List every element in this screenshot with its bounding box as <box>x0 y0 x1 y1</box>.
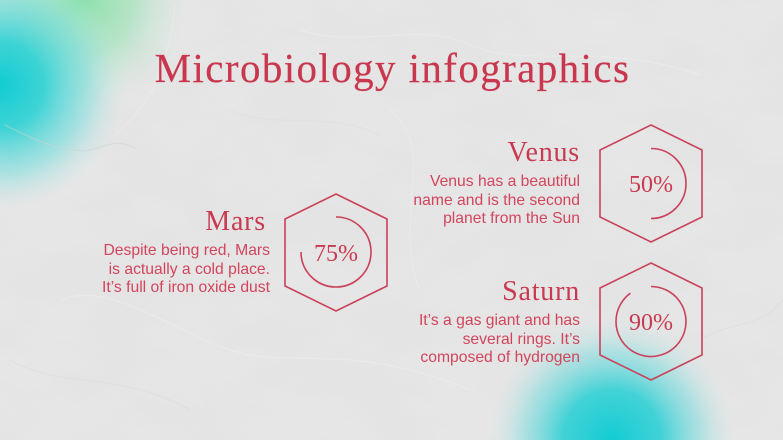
text block: Venus description: name and is the second <box>413 192 580 208</box>
heading: Mars: Mars <box>205 206 266 237</box>
heading: Saturn: Saturn <box>502 276 580 307</box>
text block: Saturn description <box>419 312 580 366</box>
chart: Mars 75%: 75% <box>314 241 358 267</box>
text block: Mars description <box>102 242 270 296</box>
chart: Venus 50%: 50% <box>629 172 673 198</box>
chart: Saturn 90%: 90% <box>629 310 673 336</box>
chart: Mars 75% <box>284 193 388 312</box>
text block: Saturn description: It’s a gas giant and has <box>419 312 580 329</box>
text block: Mars description: It’s full of iron oxide dust <box>102 279 270 296</box>
panel: Saturn <box>419 262 703 381</box>
heading: Venus: Venus <box>508 137 580 168</box>
text block: Saturn description: several rings. It’s <box>463 330 580 348</box>
chart: Venus 50% <box>599 124 703 243</box>
panel: Venus <box>413 124 703 243</box>
text block: Saturn description: composed of hydrogen <box>420 349 580 366</box>
text block: Venus description: Venus has a beautiful <box>430 173 580 190</box>
text block: Mars description: Despite being red, Mars <box>103 242 270 259</box>
text block: Venus description <box>413 173 580 227</box>
text block: Mars description: is actually a cold place. <box>109 260 270 278</box>
text block: Venus description: planet from the Sun <box>443 210 580 227</box>
panel: Mars <box>102 193 388 312</box>
title: Microbiology infographics <box>155 45 630 91</box>
chart: Saturn 90% <box>599 262 703 381</box>
